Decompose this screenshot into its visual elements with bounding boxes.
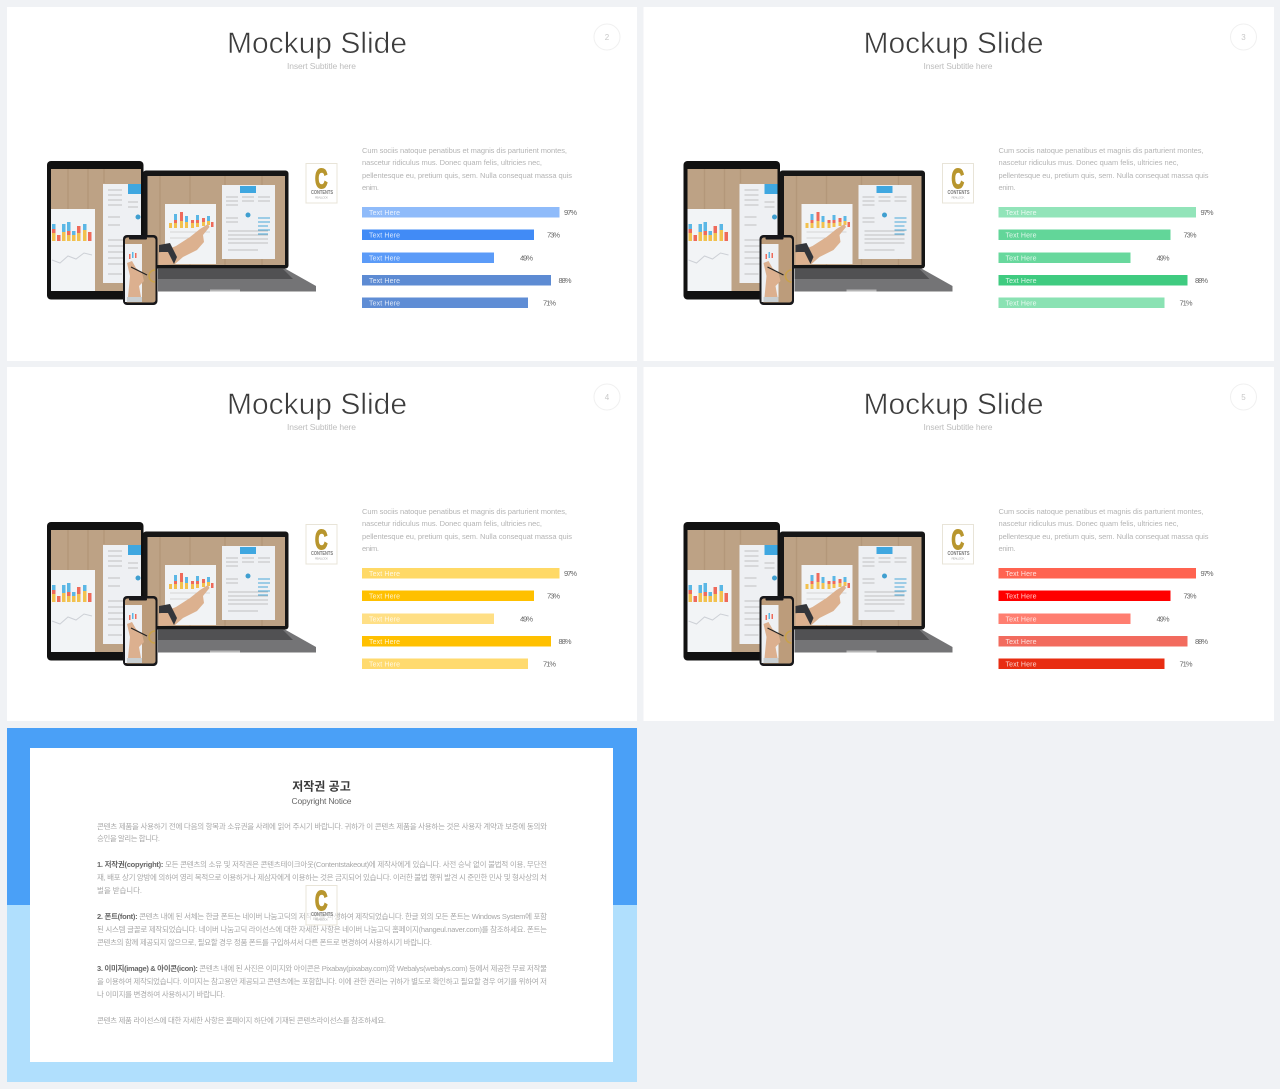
- body text: [362, 146, 572, 192]
- subtitle: Insert Subtitle here: [287, 61, 356, 71]
- logo: CONTENTS: [948, 551, 970, 557]
- body text: pellentesque eu, pretium quis, sem. Nulla consequat massa quis: [362, 171, 572, 180]
- slide panel: [7, 367, 637, 721]
- logo: CONTENTS: [948, 190, 970, 196]
- bar 88%: [362, 275, 572, 286]
- section 3: image and icon: [97, 963, 547, 999]
- white notice card: [30, 748, 613, 1062]
- device mockup: [47, 161, 316, 305]
- slide 3: green mockup: [644, 7, 1274, 361]
- title: Mockup Slide: [227, 388, 407, 421]
- bar 49%: Text Here: [1006, 256, 1037, 262]
- bar 49%: 49%: [1156, 254, 1170, 262]
- section 1: copyright: 재, 배포 상기 양방에 의하여 영리 목적으로 이용하거나 제삼자에게 이용하는 것은 금지되어 있습니다. 이러한 불법 행위 발견 시 준민한 민사 및 형사상의 처: [97, 872, 547, 882]
- bar 73%: [362, 590, 560, 601]
- bar 73%: 73%: [1184, 230, 1197, 240]
- bar 97%: 97%: [564, 208, 577, 217]
- bar 49%: 49%: [520, 614, 533, 624]
- logo: [942, 524, 974, 564]
- bar 97%: [998, 207, 1214, 218]
- bar 71%: 71%: [1180, 298, 1193, 308]
- page number: 2: [605, 33, 610, 42]
- bar 49%: [998, 614, 1170, 624]
- subtitle: Insert Subtitle here: [287, 422, 356, 432]
- body text: pellentesque eu, pretium quis, sem. Nulla consequat massa quis: [362, 532, 572, 541]
- bar 73%: Text Here: [369, 232, 400, 240]
- slide panel: [7, 7, 637, 361]
- blue frame top: [7, 728, 637, 905]
- section 3: image and icon: 나 이미지를 변경하여 사용하시기 바랍니다.: [97, 989, 225, 999]
- bar 49%: [998, 252, 1170, 263]
- bar 71%: 71%: [1180, 660, 1193, 668]
- intro paragraph: [97, 821, 547, 843]
- logo: CONTENTS: [311, 551, 334, 557]
- logo watermark: C: [315, 885, 328, 916]
- page number: [1230, 24, 1256, 50]
- bar 73%: [362, 230, 560, 240]
- page number: [594, 384, 620, 410]
- bar 49%: Text Here: [369, 256, 400, 262]
- logo watermark: CONTENTS: [311, 912, 334, 918]
- bar 73%: [998, 590, 1197, 601]
- title: Mockup Slide: [227, 27, 407, 60]
- bar 73%: 73%: [547, 230, 560, 240]
- logo: REAL LOOK: [315, 556, 328, 560]
- page number: [1230, 384, 1256, 410]
- slide panel: [644, 367, 1274, 721]
- logo: C: [952, 524, 964, 555]
- body text: enim.: [362, 544, 379, 553]
- body text: enim.: [362, 183, 379, 192]
- subtitle: Insert Subtitle here: [924, 422, 993, 432]
- section 1: copyright: 벌을 받습니다.: [97, 885, 142, 895]
- bar 73%: Text Here: [369, 594, 400, 600]
- bar 71%: 71%: [543, 298, 556, 308]
- page number: 3: [1241, 33, 1246, 42]
- bar 73%: 73%: [1184, 592, 1197, 600]
- section 3: image and icon: 3. 이미지(image) & 아이콘(icon): 콘텐츠 내에 된 사진은 이미지와 아이콘은 Pixabay(pixabay.com)와 Webalys(webalys.com) 등에서 제공한 무료 저작물: [97, 963, 547, 973]
- intro paragraph: 승인을 알리는 합니다.: [97, 833, 160, 843]
- bar chart: [362, 568, 577, 669]
- body text: Cum sociis natoque penatibus et magnis dis parturient montes,: [998, 146, 1204, 155]
- body text: enim.: [998, 183, 1016, 192]
- logo: [306, 163, 337, 203]
- body text: Cum sociis natoque penatibus et magnis dis parturient montes,: [998, 507, 1204, 516]
- logo: REAL LOOK: [952, 196, 964, 200]
- bar 88%: 88%: [558, 276, 572, 285]
- bar 97%: 97%: [1200, 208, 1214, 217]
- body text: Cum sociis natoque penatibus et magnis dis parturient montes,: [362, 507, 567, 516]
- section 3: image and icon: 을 이용하여 제작되었습니다. 이미지는 참고용만 제공되고 콘텐츠에는 포함합니다. 이에 관한 권리는 귀하가 별도로 확인하고 필요할 경우 여기를 위하여 저: [97, 976, 547, 986]
- device mockup: [47, 522, 316, 666]
- bar 97%: [362, 568, 577, 578]
- bar 88%: 88%: [1195, 637, 1208, 646]
- section 1: copyright: 1. 저작권(copyright): 모든 콘텐츠의 소유 및 저작권은 콘텐츠테이크아웃(Contentstakeout)에 제작사에게 있습니다. 사전 승낙 없이 불법적 이용, 무단전: [97, 859, 547, 869]
- body text: pellentesque eu, pretium quis, sem. Nulla consequat massa quis: [998, 171, 1209, 180]
- bar 71%: [998, 658, 1193, 669]
- slide 4: yellow mockup: [7, 367, 637, 721]
- logo watermark: REAL LOOK: [315, 918, 328, 922]
- logo: REAL LOOK: [315, 196, 328, 200]
- section 1: copyright: [97, 859, 547, 895]
- bar 97%: [362, 207, 577, 218]
- logo: C: [315, 524, 328, 555]
- bar 73%: Text Here: [1006, 232, 1037, 240]
- bar 71%: Text Here: [369, 300, 400, 308]
- bar 97%: Text Here: [369, 571, 400, 578]
- bar 88%: Text Here: [1006, 278, 1037, 285]
- logo: [306, 524, 337, 564]
- bar 49%: Text Here: [369, 616, 400, 624]
- bar 71%: [998, 298, 1193, 308]
- body text: pellentesque eu, pretium quis, sem. Nulla consequat massa quis: [998, 532, 1209, 541]
- bar 88%: 88%: [1195, 276, 1208, 285]
- bar 49%: Text Here: [1006, 616, 1037, 624]
- device mockup: [684, 522, 952, 666]
- bar 97%: Text Here: [369, 210, 400, 217]
- bar 71%: Text Here: [369, 662, 400, 668]
- bar 88%: Text Here: [369, 639, 400, 646]
- slide panel: [644, 7, 1274, 361]
- intro paragraph: 콘텐츠 제품을 사용하기 전에 다음의 항목과 소유권을 사례에 읽어 주시기 바랍니다. 귀하가 이 콘텐츠 제품을 사용하는 것은 사용자 계약과 보증에 동의와: [97, 821, 547, 831]
- logo: C: [952, 163, 964, 194]
- bar 88%: Text Here: [369, 278, 400, 285]
- section 2: font: 콘텐츠의 함께 제공되지 않으므로, 필요할 경우 정품 폰트를 구입하셔서 다른 폰트로 변경하여 사용하시기 바랍니다.: [97, 937, 432, 947]
- bar 71%: Text Here: [1006, 300, 1037, 308]
- page number: 5: [1241, 393, 1246, 402]
- subtitle: Insert Subtitle here: [924, 61, 993, 71]
- bar 97%: Text Here: [1006, 571, 1037, 578]
- section 2: font: [97, 911, 547, 947]
- closing line: 콘텐츠 제품 라이선스에 대한 자세한 사항은 홈페이지 하단에 기재된 콘텐츠라이선스를 참조하세요.: [97, 1015, 386, 1025]
- bar 88%: Text Here: [1006, 639, 1037, 646]
- logo watermark: [306, 885, 337, 925]
- body text: [998, 507, 1209, 553]
- logo: REAL LOOK: [952, 556, 964, 560]
- body text: nascetur ridiculus mus. Donec quam felis, ultricies nec,: [362, 519, 542, 528]
- body text: Cum sociis natoque penatibus et magnis dis parturient montes,: [362, 146, 567, 155]
- bar 97%: 97%: [1200, 569, 1214, 578]
- slide 2: blue mockup: [7, 7, 637, 361]
- bar 71%: Text Here: [1006, 662, 1037, 668]
- body text: nascetur ridiculus mus. Donec quam felis, ultricies nec,: [998, 158, 1178, 167]
- page number: [594, 24, 620, 50]
- copyright notice panel: [7, 728, 637, 1082]
- logo: [942, 163, 974, 203]
- bar 49%: 49%: [520, 254, 533, 262]
- bar 71%: [362, 658, 556, 669]
- section 2: font: 2. 폰트(font): 콘텐츠 내에 된 서체는 한글 폰트는 네이버 나눔고딕의 저작물을 파생하여 제작되었습니다. 한글 외의 모든 폰트는 Windows System에 포함: [97, 911, 547, 921]
- bar 71%: [362, 298, 556, 308]
- notice title: 저작권 공고: [292, 778, 351, 794]
- body text: [998, 146, 1209, 192]
- bar 88%: 88%: [558, 637, 572, 646]
- section 2: font: 된 시스템 글꼴로 제작되었습니다. 네이버 나눔고딕 라이선스에 대한 자세한 사항은 네이버 나눔고딕 홈페이지(hangeul.naver.com)를 참조하세요. 폰트는: [97, 924, 547, 934]
- bar 73%: 73%: [547, 592, 560, 600]
- bar 97%: Text Here: [1006, 210, 1037, 217]
- bar 49%: 49%: [1156, 614, 1170, 624]
- bar 49%: [362, 614, 533, 624]
- page number: 4: [605, 393, 610, 402]
- notice subtitle: Copyright Notice: [292, 796, 352, 806]
- title: Mockup Slide: [864, 388, 1044, 421]
- bar 88%: [998, 636, 1208, 646]
- body text: nascetur ridiculus mus. Donec quam felis, ultricies nec,: [998, 519, 1178, 528]
- slide 5: red mockup: [644, 367, 1274, 721]
- body text: nascetur ridiculus mus. Donec quam felis, ultricies nec,: [362, 158, 542, 167]
- logo: C: [315, 163, 328, 194]
- body text: [362, 507, 572, 553]
- bar 49%: [362, 252, 533, 263]
- bar 97%: [998, 568, 1214, 578]
- bar chart: [362, 207, 577, 308]
- bar chart: [998, 207, 1214, 308]
- title: Mockup Slide: [864, 27, 1044, 60]
- bar 88%: [998, 275, 1208, 286]
- bar 88%: [362, 636, 572, 646]
- body text: enim.: [998, 544, 1016, 553]
- bar 73%: [998, 230, 1197, 240]
- bar 71%: 71%: [543, 660, 556, 668]
- logo: CONTENTS: [311, 190, 334, 196]
- device mockup: [684, 161, 952, 305]
- bar chart: [998, 568, 1214, 669]
- bar 73%: Text Here: [1006, 594, 1037, 600]
- light blue frame bottom: [7, 905, 637, 1082]
- bar 97%: 97%: [564, 569, 577, 578]
